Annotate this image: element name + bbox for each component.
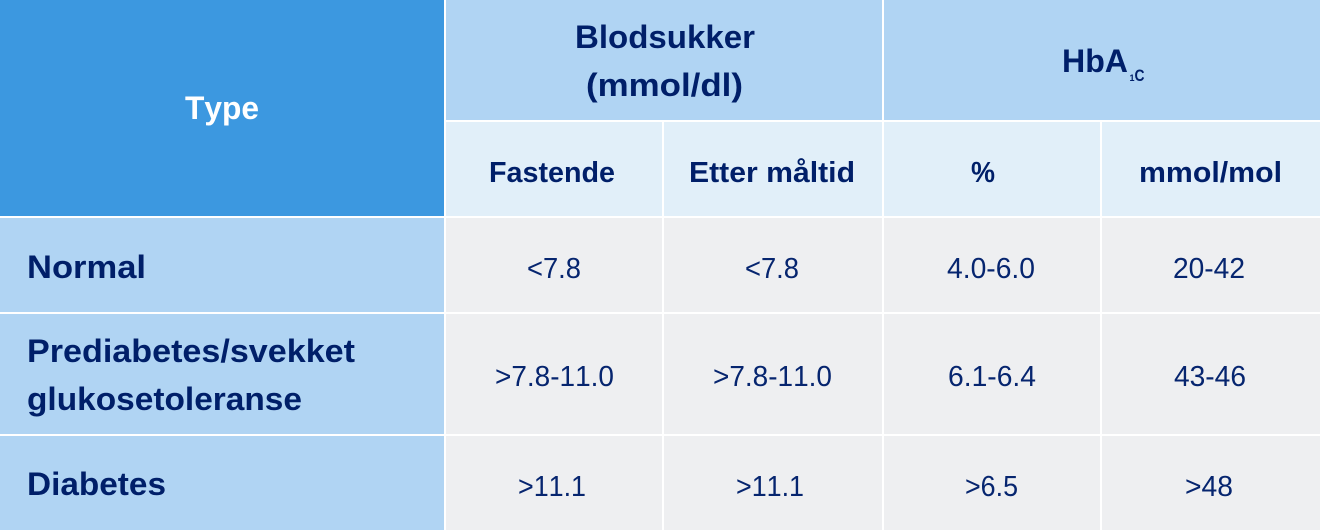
subheader: Etter måltid: Etter måltid: [689, 157, 855, 189]
header cell: Type: [0, 0, 444, 216]
header cell: Type: Type: [185, 90, 259, 126]
value: Diabetes percent: [884, 436, 1100, 530]
subheader: percent: %: [971, 157, 995, 189]
value: Prediabetes percent: 6.1-6.4: [948, 361, 1036, 393]
value: Prediabetes fasting: >7.8-11.0: [495, 361, 614, 393]
header cell: Blodsukker: Blodsukker: [575, 19, 755, 55]
value: Prediabetes mmol/mol: [1102, 314, 1320, 434]
header cell: Blodsukker: [446, 0, 882, 120]
value: Diabetes fasting: >11.1: [518, 471, 586, 503]
row label: Prediabetes: [0, 314, 444, 434]
value: Normal percent: 4.0-6.0: [947, 253, 1035, 285]
value: Prediabetes fasting: [446, 314, 662, 434]
row label: Diabetes: Diabetes: [27, 466, 166, 502]
subheader: mmol/mol: mmol/mol: [1139, 157, 1282, 189]
value: Diabetes mmol/mol: [1102, 436, 1320, 530]
row label: Prediabetes: Prediabetes/svekket: [27, 333, 355, 369]
row label: Normal: [0, 218, 444, 312]
header cell: HbA1c: [884, 0, 1320, 120]
value: Diabetes percent: >6.5: [965, 471, 1018, 503]
subheader: Etter måltid: [664, 122, 882, 216]
value: Normal percent: [884, 218, 1100, 312]
value: Prediabetes percent: [884, 314, 1100, 434]
value: Prediabetes after meal: [664, 314, 882, 434]
row: Diabetes: [0, 436, 1320, 530]
value: Normal after meal: <7.8: [745, 253, 799, 285]
subheader: percent: [884, 122, 1100, 216]
value: Normal mmol/mol: 20-42: [1173, 253, 1245, 285]
value: Normal fasting: [446, 218, 662, 312]
row: Prediabetes: [0, 314, 1320, 434]
value: Normal after meal: [664, 218, 882, 312]
header cell: HbA1c: C: [1134, 67, 1145, 85]
value: Prediabetes after meal: >7.8-11.0: [713, 361, 832, 393]
row label: Prediabetes: glukosetoleranse: [27, 381, 302, 417]
header cell: HbA1c: 1: [1130, 73, 1135, 83]
value: Prediabetes mmol/mol: 43-46: [1174, 361, 1246, 393]
header cell: HbA1c: HbA: [1062, 43, 1128, 79]
subheader: Fastende: Fastende: [489, 157, 615, 189]
row label: Diabetes: [0, 436, 444, 530]
value: Normal fasting: <7.8: [527, 253, 581, 285]
value: Diabetes after meal: [664, 436, 882, 530]
subheader: mmol/mol: [1102, 122, 1320, 216]
header cell: Blodsukker: (mmol/dl): [586, 67, 743, 103]
value: Diabetes after meal: >11.1: [736, 471, 804, 503]
value: Diabetes mmol/mol: >48: [1185, 471, 1233, 503]
row label: Normal: Normal: [27, 249, 146, 285]
row: Normal: [0, 218, 1320, 312]
value: Normal mmol/mol: [1102, 218, 1320, 312]
subheader: Fastende: [446, 122, 662, 216]
value: Diabetes fasting: [446, 436, 662, 530]
